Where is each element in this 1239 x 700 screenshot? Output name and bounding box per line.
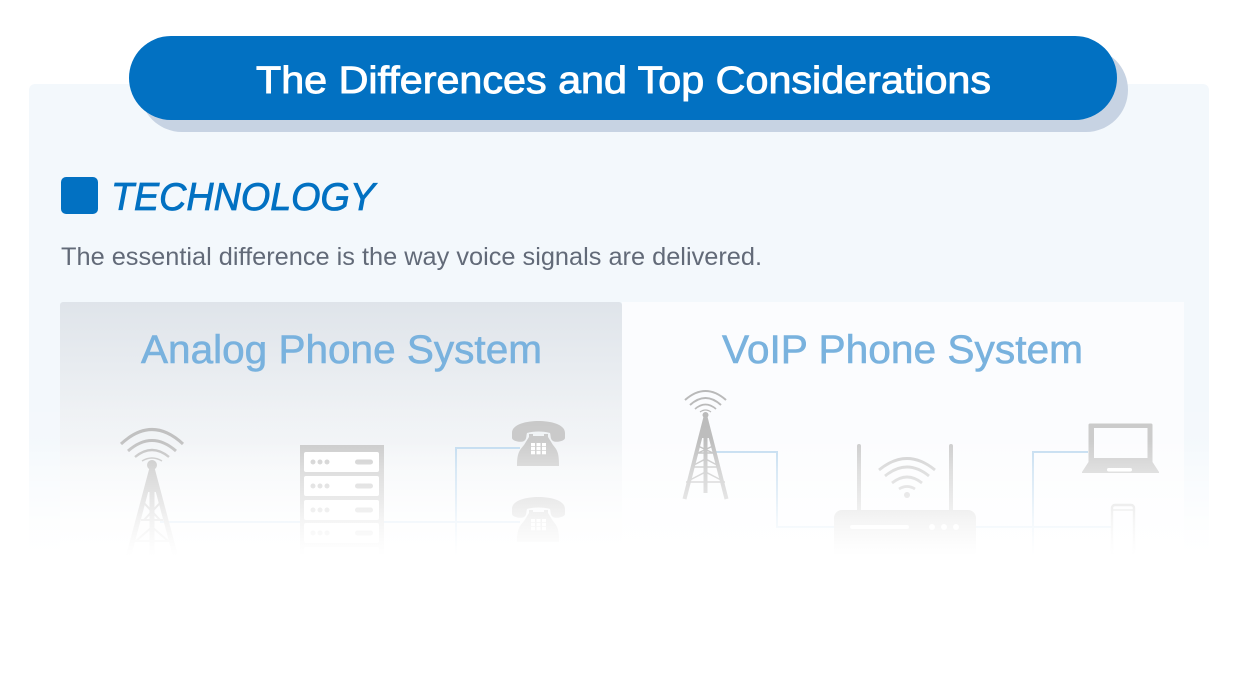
- background panel: [29, 84, 1209, 584]
- router wifi waves: [879, 458, 935, 489]
- icon: router: [834, 444, 976, 560]
- connector lines: voip: [714, 452, 1112, 560]
- icon: analog tower: [121, 430, 183, 558]
- connector lines: analog: [160, 448, 520, 560]
- icon: telephone 1: [512, 421, 565, 466]
- icon: laptop: [1082, 424, 1159, 473]
- panel: voip phone system: [622, 302, 1184, 572]
- icon: server rack: [300, 445, 384, 567]
- panel: analog phone system: [60, 302, 622, 572]
- heading: voip phone system: VoIP Phone System: [722, 328, 1083, 372]
- title banner: [129, 36, 1128, 132]
- heading: analog phone system: Analog Phone System: [141, 328, 542, 372]
- icon: telephone 2: [512, 497, 565, 542]
- title: The Differences and Top Considerations: [256, 60, 991, 102]
- icon: voip tower: [684, 391, 726, 499]
- fade overlay: [0, 380, 1239, 570]
- banner shadow: [140, 48, 1128, 132]
- icon: smartphone: [1112, 505, 1134, 555]
- icon: section square: [61, 177, 98, 214]
- section heading: technology: TECHNOLOGY: [111, 176, 378, 219]
- text: description: The essential difference is the way voice signals are delivered.: [61, 243, 762, 271]
